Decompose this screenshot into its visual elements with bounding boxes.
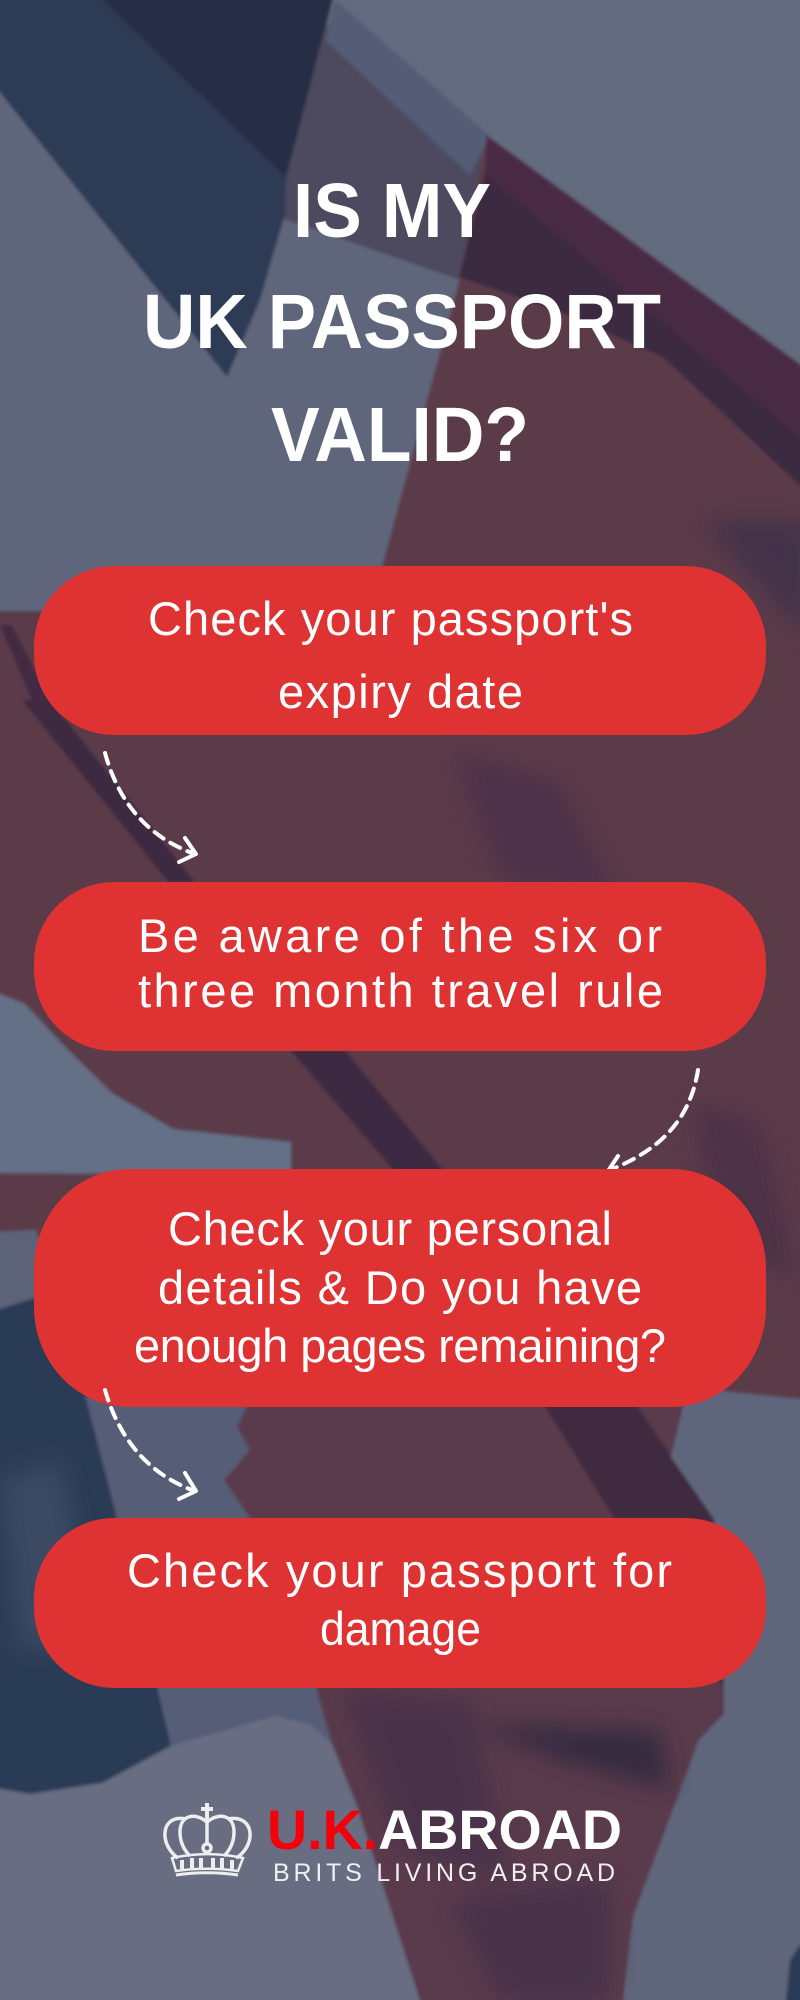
- step 2 pill: three month travel rule: [138, 964, 663, 1017]
- title: IS MY: [293, 168, 491, 254]
- step 3 pill: details & Do you have: [158, 1261, 642, 1314]
- step 1 pill: [34, 566, 766, 735]
- step 4 pill: [34, 1518, 766, 1688]
- title: UK PASSPORT: [143, 279, 661, 365]
- wordmark: U.K.ABROAD: [267, 1798, 622, 1861]
- step 2 pill: [34, 882, 766, 1051]
- title: [143, 168, 661, 478]
- tagline: BRITS LIVING ABROAD: [273, 1859, 615, 1887]
- step 4 pill: Check your passport for: [127, 1544, 672, 1597]
- step 4 pill: damage: [320, 1602, 481, 1655]
- arrow: step 3 to step 4: [105, 1390, 196, 1499]
- step 3 pill: Check your personal: [168, 1202, 612, 1255]
- icon: crown: [165, 1803, 250, 1875]
- step 3 pill: enough pages remaining?: [134, 1319, 666, 1372]
- step 3 pill: [34, 1169, 766, 1407]
- arrow: step 1 to step 2: [105, 753, 196, 862]
- title: VALID?: [271, 392, 529, 478]
- step 1 pill: Check your passport's: [148, 592, 633, 645]
- logo: [165, 1798, 622, 1887]
- arrow: step 2 to step 3: [608, 1070, 698, 1181]
- step 1 pill: expiry date: [278, 665, 523, 718]
- step 2 pill: Be aware of the six or: [138, 909, 662, 962]
